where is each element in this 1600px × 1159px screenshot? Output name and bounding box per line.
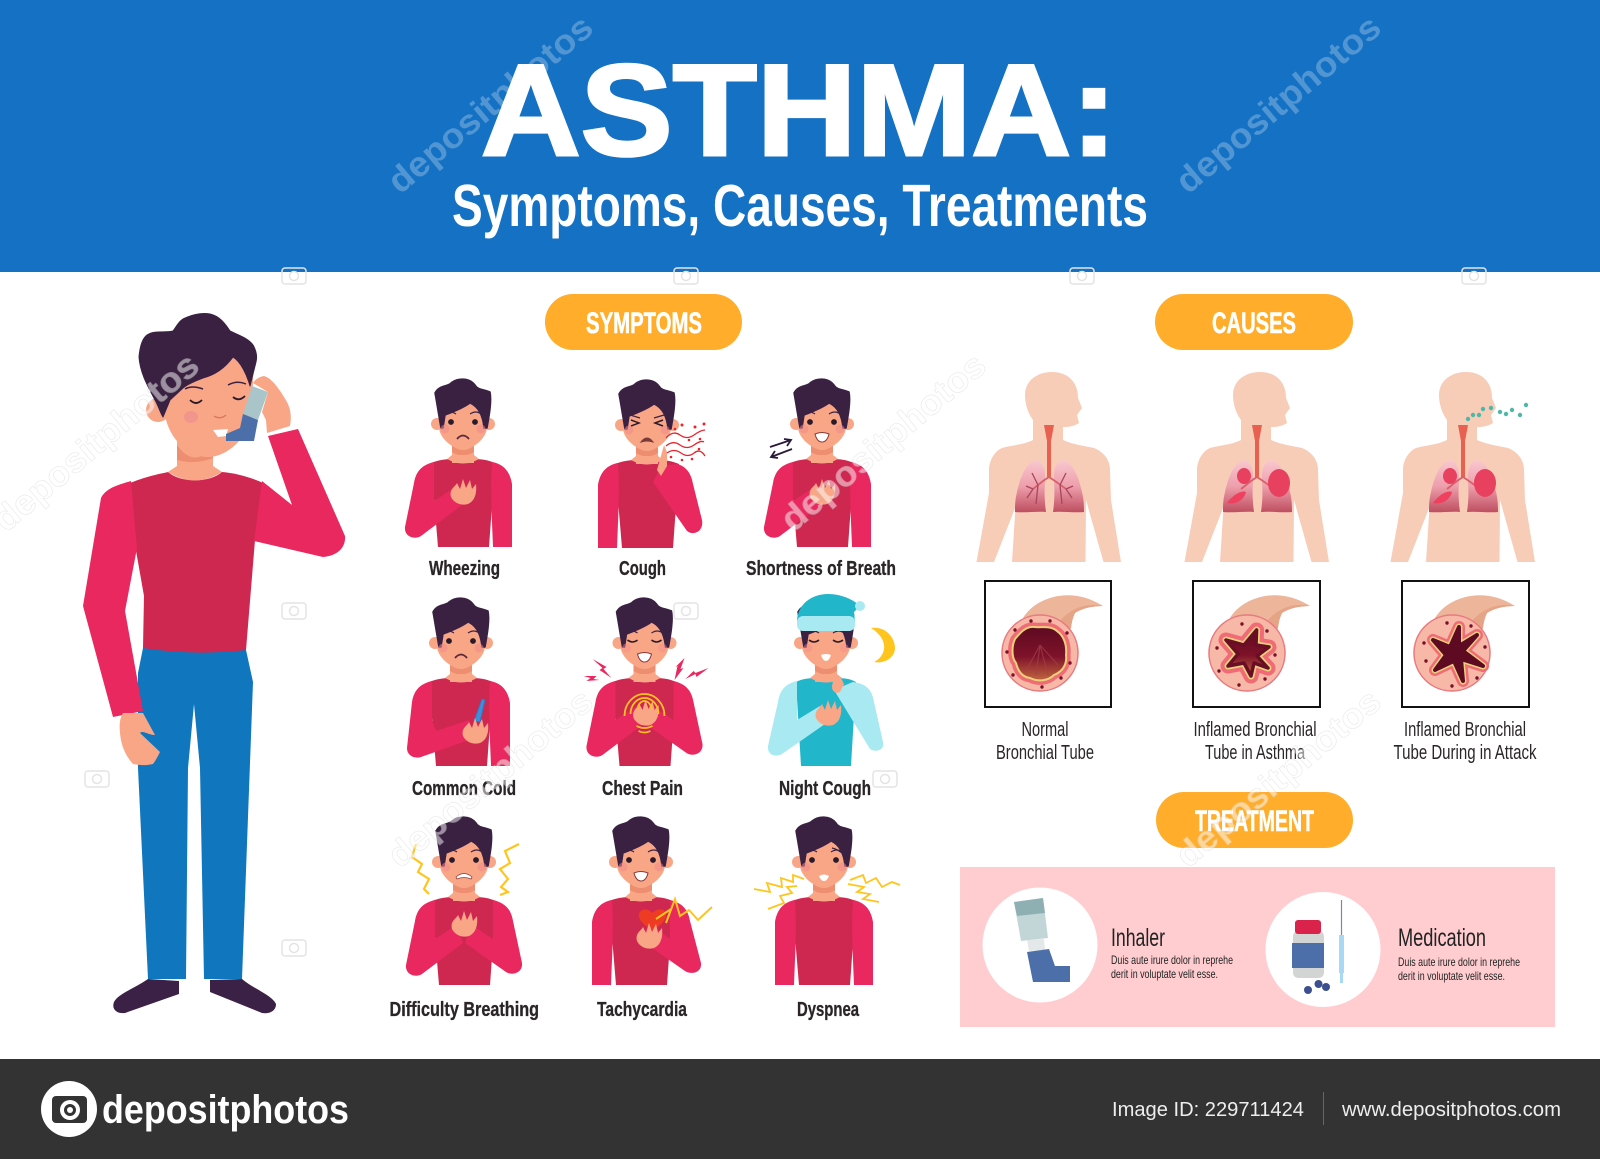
header banner xyxy=(0,0,1600,272)
diagram: normal tube xyxy=(1002,595,1103,691)
icon: moon xyxy=(871,628,895,662)
caption: Normal xyxy=(1022,719,1068,741)
pill: causes: CAUSES xyxy=(1212,307,1296,340)
symptom: difficulty breathing xyxy=(390,817,539,1021)
panel: inflamed tube during attack xyxy=(1394,581,1537,764)
lungs: normal xyxy=(976,372,1121,562)
figure: shortness of breath xyxy=(764,379,871,547)
figure: common cold xyxy=(407,598,510,766)
icon: left zigzags xyxy=(754,875,804,909)
diagram: inflamed tube xyxy=(1209,595,1310,691)
panel: inflamed tube in asthma: Tube in Asthma xyxy=(1205,742,1306,764)
treatment: medication: derit in voluptate velit esse. xyxy=(1398,969,1505,983)
lungs: attack xyxy=(1390,372,1535,562)
label: Dyspnea xyxy=(797,999,860,1021)
watermarks xyxy=(0,7,1486,956)
panel: normal bronchial tube xyxy=(985,581,1111,764)
icon: inhaler xyxy=(982,888,1098,1002)
caption: Inflamed Bronchial xyxy=(1404,719,1526,741)
title: ASTHMA: xyxy=(481,37,1117,183)
diagram: attack tube xyxy=(1414,595,1515,691)
heading: Medication xyxy=(1398,924,1486,952)
symptom: chest pain xyxy=(584,598,708,800)
footer bar xyxy=(0,1059,1600,1159)
label: Common Cold xyxy=(412,778,516,800)
figure: dyspnea xyxy=(754,817,900,985)
pill: symptoms: SYMPTOMS xyxy=(586,307,702,340)
caption: Inflamed Bronchial xyxy=(1194,719,1316,741)
figure: difficulty breathing xyxy=(406,817,522,985)
watermarks: depositphotos xyxy=(1168,7,1388,201)
treatment: inhaler xyxy=(982,888,1233,1002)
description: Duis aute irure dolor in reprehe xyxy=(1398,955,1520,969)
icon: nightcap xyxy=(797,594,865,631)
label: Wheezing xyxy=(429,558,500,580)
label: Night Cough xyxy=(779,778,871,800)
symptom: cough xyxy=(598,380,706,580)
description: Duis aute irure dolor in reprehe xyxy=(1111,953,1233,967)
panel: inflamed tube during attack: Tube During in Attack xyxy=(1394,742,1537,764)
pill: treatment: TREATMENT xyxy=(1195,805,1314,838)
icon: pills and syringe xyxy=(1266,892,1380,1007)
icon: pain rings xyxy=(624,694,664,732)
icon: right zigzags xyxy=(848,875,900,902)
brand name: depositphotos xyxy=(102,1088,349,1132)
label: Tachycardia xyxy=(597,999,688,1021)
symptom: common cold xyxy=(407,598,516,800)
symptom: wheezing xyxy=(405,379,512,580)
label: Chest Pain xyxy=(602,778,683,800)
icon: airborne particles xyxy=(1466,403,1528,421)
symptom: dyspnea xyxy=(754,817,900,1021)
heading: Inhaler xyxy=(1111,924,1165,952)
image id: Image ID: 229711424 xyxy=(1112,1099,1304,1121)
website: www.depositphotos.com xyxy=(1341,1099,1561,1121)
icon: heart xyxy=(639,909,666,930)
icon: breath arrows xyxy=(770,439,792,458)
icon: pain bolts xyxy=(584,658,708,681)
icon: pulse line xyxy=(656,899,712,923)
figure: man using inhaler xyxy=(83,314,345,1013)
icon: logo xyxy=(41,1081,97,1137)
pill: causes xyxy=(1155,294,1353,350)
panel: treatment xyxy=(960,867,1555,1027)
pill: symptoms xyxy=(545,294,742,350)
watermarks: depositphotos xyxy=(380,7,600,201)
pill: treatment xyxy=(1156,792,1353,848)
icon: thermometer xyxy=(474,699,485,722)
symptom: night cough xyxy=(768,594,895,800)
figure: cough xyxy=(598,380,706,548)
figure: wheezing xyxy=(405,379,512,547)
icon: right zigzag xyxy=(500,844,519,895)
watermarks: depositphotos xyxy=(1168,681,1388,875)
icon: left zigzag xyxy=(412,844,429,894)
panel: normal bronchial tube: Bronchial Tube xyxy=(996,742,1094,764)
symptom: tachycardia xyxy=(592,817,712,1021)
icon: inhaler held to mouth xyxy=(226,386,268,441)
treatment: inhaler: derit in voluptate velit esse. xyxy=(1111,967,1218,981)
symptom: shortness of breath xyxy=(746,379,896,580)
icon: cough droplets xyxy=(666,422,706,461)
label: Difficulty Breathing xyxy=(390,999,539,1021)
label: Shortness of Breath xyxy=(746,558,896,580)
label: Cough xyxy=(619,558,666,580)
treatment: medication xyxy=(1266,892,1520,1007)
figure: night cough xyxy=(768,594,895,766)
figure: chest pain xyxy=(584,598,708,766)
lungs: inflamed xyxy=(1184,372,1329,562)
watermarks: depositphotos xyxy=(380,681,600,875)
subtitle: Symptoms, Causes, Treatments xyxy=(452,173,1148,239)
watermarks: depositphotos xyxy=(773,345,993,539)
figure: tachycardia xyxy=(592,817,712,985)
panel: inflamed tube in asthma xyxy=(1193,581,1320,764)
